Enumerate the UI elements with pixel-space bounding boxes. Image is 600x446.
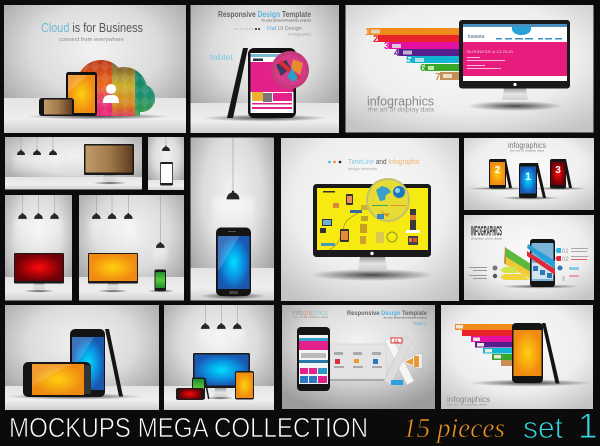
panel: cloud is for business xyxy=(4,5,186,133)
label: set 1: 1 xyxy=(578,407,597,446)
icon: x diagram xyxy=(384,337,427,385)
shadow xyxy=(26,114,170,120)
label: flat ui design: Flat UI Design xyxy=(267,26,302,32)
dots xyxy=(234,28,260,30)
subheading: business projects: for your personal business projects xyxy=(262,18,311,22)
icon: phone side view xyxy=(227,48,248,118)
panel: infographics phone with ribbons: INFOGRAPHICS xyxy=(471,224,502,238)
panel: infographics monitor with ribbons xyxy=(346,5,594,132)
heading: infographics: infographics xyxy=(508,141,546,150)
icon: blue monitor xyxy=(193,353,250,400)
shadow xyxy=(203,114,327,122)
icon: side phone xyxy=(204,378,210,399)
icon: blue phone xyxy=(216,228,251,296)
icon: phone with tiles xyxy=(297,327,330,391)
chart: ribbon steps: 4 xyxy=(394,48,400,59)
label: set 1: set xyxy=(523,410,563,445)
icon: phone 1 blue: 1 xyxy=(525,171,531,183)
icon: red landscape phone xyxy=(176,388,204,400)
icon: orange monitor xyxy=(88,253,138,292)
label: flat u: Flat U xyxy=(414,321,427,327)
panel: orange and blue phones xyxy=(5,305,159,410)
panel: lamp and white phone xyxy=(148,137,184,190)
icon: black phone xyxy=(530,239,555,287)
lamps xyxy=(201,305,242,329)
icon: landscape phone xyxy=(39,98,74,116)
chart: ribbon steps xyxy=(455,324,513,366)
subheading: the art of display data: the art of display data xyxy=(368,108,435,114)
heading: responsive design template: Responsive Design Template xyxy=(347,310,427,317)
shadow xyxy=(310,269,434,281)
site heading: BUSINESS & CLOUD xyxy=(467,49,513,54)
icon: yellow monitor xyxy=(313,179,431,257)
panel: timeline and infographic yellow monitor xyxy=(281,138,459,301)
ribbon: green and yellow xyxy=(500,246,531,280)
panel: lamps orange monitor and green phone xyxy=(79,195,184,300)
list item 02: 02 xyxy=(562,257,569,263)
shadow xyxy=(500,284,580,288)
icon: orange landscape phone xyxy=(23,362,91,397)
magnifier xyxy=(367,179,409,221)
icon: orange tablet xyxy=(235,371,254,400)
ribbon: blue and red xyxy=(527,244,555,275)
icon: tablet with pink site xyxy=(248,48,296,118)
lamps xyxy=(18,195,59,219)
label: 15 pieces: 15 pieces xyxy=(403,413,505,443)
panel: responsive design template phone with x diagram xyxy=(282,305,435,409)
icon: phone side view xyxy=(105,329,123,396)
panel: three lamps red monitor xyxy=(5,195,72,300)
band with service icons xyxy=(330,344,386,381)
panel: three lamps brown monitor xyxy=(5,137,142,190)
shadow xyxy=(468,380,592,386)
lamp xyxy=(227,138,239,199)
text left xyxy=(469,266,498,279)
heading: infographics: infographics xyxy=(292,308,328,317)
lamp xyxy=(162,137,170,151)
chart: ribbon steps: 1 xyxy=(365,27,371,38)
heading: infographics: infographics xyxy=(367,94,434,108)
icon: white phone xyxy=(160,162,173,186)
shadows xyxy=(467,187,587,200)
icon: green phone xyxy=(147,270,175,292)
subheading: design elements: design elements xyxy=(348,167,377,171)
label: 01: 01 xyxy=(394,338,399,344)
panel: lamps and device family xyxy=(164,305,274,410)
icon: pie badge xyxy=(271,51,309,89)
heading: responsive design template: Responsive Design Template xyxy=(218,10,311,19)
icon: brown monitor xyxy=(84,144,134,184)
icon: green phone xyxy=(192,378,205,400)
panel: responsive design template tablet xyxy=(190,5,339,133)
shadow xyxy=(200,292,266,300)
subheading: the art of display data xyxy=(510,148,545,152)
label: infographics: & infographics xyxy=(288,32,311,36)
chart: ribbon steps xyxy=(365,27,459,83)
icon: red monitor xyxy=(14,253,64,292)
icon: blue phone xyxy=(70,329,105,397)
icon: phone 2 orange: 2 xyxy=(495,165,501,176)
subheading: the art of display data xyxy=(447,402,488,406)
label: set 1 xyxy=(523,407,597,446)
icon: orange phone xyxy=(512,323,543,383)
lamps xyxy=(92,195,165,248)
panel: phone with ribbons infographics xyxy=(441,305,593,409)
dots xyxy=(328,161,341,163)
subheading: display your data xyxy=(471,236,502,240)
icon: tablet xyxy=(66,72,97,116)
subheading: business projects: for your personal business projects xyxy=(384,316,428,320)
icon: colourful cloud xyxy=(80,60,155,116)
lamps xyxy=(17,137,57,155)
panel: infographics three phones xyxy=(464,138,594,210)
list item 01: 01 xyxy=(562,249,569,255)
subheading: the art of display data xyxy=(293,315,329,319)
timeline details xyxy=(320,191,420,250)
heading: cloud is for business: Cloud is for Business xyxy=(41,21,143,35)
shadow xyxy=(7,394,143,400)
chart: ribbon steps: 5 xyxy=(406,55,412,66)
heading: timeline and infographic: TimeLine and Infographic xyxy=(348,159,420,166)
chart: ribbon steps: 3 xyxy=(384,41,390,52)
chart: ribbon steps: 7 xyxy=(435,72,441,83)
icon: stand xyxy=(358,257,387,270)
icon: desktop monitor xyxy=(459,20,570,111)
icon: phone side view xyxy=(542,323,560,384)
label: tablet: tablet xyxy=(210,52,234,62)
chart: ribbon steps: 2 xyxy=(373,34,379,45)
title: mockups mega collection: MOCKUPS MEGA COLLECTION xyxy=(9,412,368,443)
heading: infographics: infographics xyxy=(447,394,490,404)
subheading: connect: connect from everywhere xyxy=(59,37,124,43)
panel: lamp and blue phone xyxy=(190,138,274,300)
icon: phone 3 red: 3 xyxy=(555,165,561,176)
small icons right xyxy=(558,266,579,281)
chart: ribbon steps: 6 xyxy=(420,63,426,74)
site logo: tuvacea xyxy=(468,34,485,40)
panel: infographics phone with ribbons xyxy=(464,215,594,300)
